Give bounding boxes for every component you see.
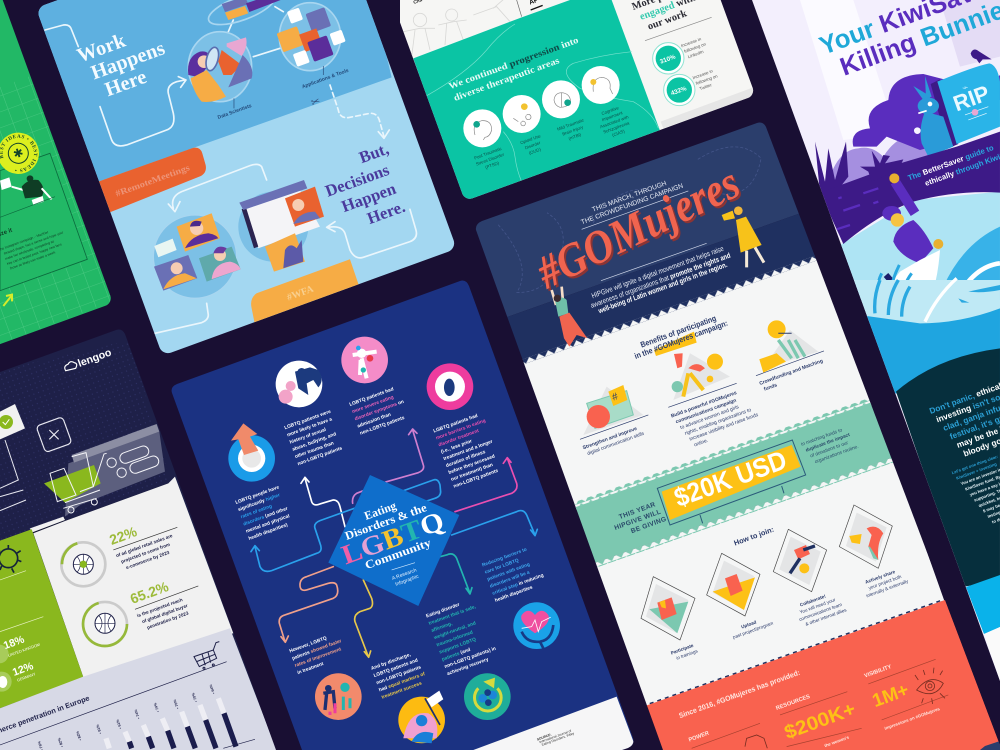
stat: $200K+: $200K+ (782, 699, 859, 744)
step: participate (641, 577, 699, 662)
bushes (825, 74, 1000, 207)
text: sexual abuse history: non-LGBTQ patients (297, 445, 343, 467)
icon: fist (745, 735, 767, 748)
label: cias: Schizophrenia (603, 120, 631, 135)
panel: eating disorders and the LGBTQ community (160, 270, 660, 750)
center diamond: title: Disorders & the (343, 501, 428, 543)
text: sexual abuse history: other trauma than (294, 440, 335, 460)
dark section body: Let's get one thing clear: (951, 454, 999, 475)
icon: communication skills: # (611, 391, 620, 403)
label: impressions: impressions on #GOMujeres (884, 706, 941, 731)
foam lower (925, 278, 957, 322)
label: ptsd: Stress Disorder (475, 152, 505, 167)
upper blue section (38, 0, 392, 182)
teal band (572, 402, 893, 564)
stat: united kingdom: 18% (2, 633, 27, 652)
heading second line: diverse therapeutic areas (453, 56, 561, 104)
person climbing (882, 173, 943, 290)
title: #GOMujeres: #GOMujeres (530, 159, 750, 302)
divider and logo (517, 0, 543, 17)
label: crowdfunding: funds (763, 382, 778, 393)
header top band (470, 112, 806, 318)
water (840, 192, 1000, 300)
wave details (958, 285, 1000, 303)
reeds (877, 265, 912, 300)
header text: THE CROWDFUNDING CAMPAIGN (580, 183, 684, 226)
illustration: app window with video callers (238, 180, 324, 272)
text: more barriers: LGBTQ patients had (433, 413, 479, 435)
icon: check card (0, 404, 26, 511)
stat: 65.2 percent: penetration by 2023 (146, 610, 190, 630)
text: higher rates: significantly higher (238, 493, 281, 513)
dark purple band (820, 132, 1000, 244)
label: build campaign: communications campaign (675, 398, 737, 425)
icon: close box (36, 417, 72, 453)
label: linkedin: Increase in (680, 36, 702, 48)
figure: woman holding title (552, 287, 587, 347)
text: sexual abuse history: LGBTQ patients were (284, 409, 332, 431)
tag: remote meetings: #RemoteMeetings (114, 162, 191, 199)
panel: GOMujeres campaign (470, 112, 1000, 750)
background rays (800, 0, 1000, 140)
tag: wfa: #WFA (286, 283, 316, 303)
body text: Key can to tested post, happy new fans (6, 242, 63, 266)
text: reducing barriers: patients with eating (486, 562, 531, 583)
connector lines right (452, 458, 537, 536)
icon: heart in hands (513, 602, 560, 649)
flow lines (45, 7, 416, 333)
step: collaborate (773, 529, 848, 628)
label: build campaign: online. (693, 438, 709, 448)
stat: united kingdom (0, 633, 41, 663)
spiky grass (815, 142, 848, 200)
bottom shade (661, 87, 757, 128)
text: safe treatment: trauma-informed (436, 630, 474, 648)
footer source text: SOURCE: (536, 733, 552, 742)
text: matching funds: duplicate the impact (805, 432, 851, 454)
icon: coral progress (315, 673, 362, 720)
header rules (582, 191, 707, 281)
reeds lower (875, 280, 910, 317)
step: collaborate: You will need your (799, 597, 837, 615)
icon: post traumatic stress (463, 109, 501, 147)
label: women: the women's (824, 734, 850, 748)
header lower band (505, 211, 824, 367)
header text: THIS MARCH, THROUGH (591, 180, 668, 214)
label: twitter: Twitter (699, 82, 713, 91)
step: upload: Upload (741, 619, 757, 630)
body text: make her wholesale, completing as (5, 239, 55, 261)
teal band teeth (570, 397, 895, 569)
foam (957, 263, 1000, 300)
text: reducing barriers: health disparities (494, 584, 534, 604)
illustration: data scientist (188, 32, 253, 121)
icon: pink circle with figure (341, 337, 388, 383)
label: power: POWER (688, 731, 710, 744)
chart baseline (223, 739, 255, 748)
label: oud: (OUD) (528, 146, 542, 156)
text: safe treatment: treatment that is safe, (428, 604, 477, 627)
footer source section (473, 697, 637, 750)
text: matching funds: of donations to our (809, 440, 849, 459)
text: more barriers: disorder treatment (438, 428, 480, 448)
text: severe symptoms: disorder symptoms on (354, 400, 405, 422)
stat: 22 percent: projected to come from (120, 542, 171, 564)
text: more barriers: non-LGBTQ patients (453, 468, 499, 490)
decorative squiggles (493, 135, 777, 296)
step: collaborate: Collaborate! (799, 593, 827, 608)
text: higher rates: health disparities) (248, 522, 289, 542)
text: sexual abuse history: history of sexual (289, 427, 327, 446)
label: build campaign: increase visibility and raise funds (689, 412, 760, 443)
label: twitter: Increase in (692, 68, 714, 80)
coral heading: Since 2016, #GOMujeres has provided: (678, 668, 801, 720)
stat: 22 percent: e-commerce by 2023 (125, 550, 170, 570)
icon: stop hand (427, 363, 473, 410)
dark dome section (896, 348, 1000, 587)
text: reducing barriers: critical step in reducing (492, 573, 545, 597)
footer band (980, 741, 1000, 750)
label: build campaign: rights, enabling organizations to (684, 407, 752, 437)
text: more barriers: before they accessed (448, 453, 496, 476)
figure with paper (0, 175, 55, 217)
intro text line two: awareness of organizations that promote the rights and (589, 251, 732, 310)
label: cias: Cognitive (601, 105, 620, 116)
text: reducing barriers: care for LGBTQ (484, 558, 520, 576)
stat: germany: GERMANY (17, 672, 37, 683)
center diamond: title: Eating (363, 499, 398, 523)
step: actively share: internally & externally (866, 578, 909, 598)
stat: 432%: 432% (670, 85, 688, 97)
footer source text: Eating Disorders, Wiley (541, 731, 575, 747)
icon: yellow flag (398, 691, 445, 743)
label: communication skills: digital communication skills (587, 431, 646, 457)
title: but decisions happen here: Here. (364, 197, 408, 228)
panel: kiwisaver bunnies (740, 0, 1000, 700)
dark section body: KiwiSaver + investing (955, 461, 998, 481)
label: visibility: VISIBILITY (864, 664, 893, 680)
arrow (3, 295, 12, 306)
dark section heading: investing isn't so (935, 392, 1000, 424)
center diamond: title: Community (363, 536, 433, 572)
figure: woman with megaphone (722, 206, 764, 267)
white join section (592, 457, 944, 707)
icon: build campaign (668, 353, 737, 407)
icon: up arrow circle (228, 423, 275, 482)
coral edge (642, 599, 944, 706)
body text: the Instagram campaign – MacKiet (0, 230, 49, 252)
bar chart: penetration by country (37, 683, 236, 750)
text: safe treatment: Eating disorder (425, 602, 461, 620)
label: crowdfunding: Crowdfunding and Matching (759, 358, 824, 387)
panel: lengoo e-commerce (0, 310, 290, 750)
bar chart: penetration by country: • 64% (209, 683, 216, 694)
bar chart: penetration by country: • 91% (95, 723, 103, 734)
center diamond: title: A Research (391, 567, 418, 582)
label: mtbi: (mTBI) (568, 132, 582, 141)
step: actively share (839, 505, 909, 598)
band text: The BetterSaver guide to (907, 143, 995, 183)
icon: virus network (0, 545, 21, 573)
teal section (413, 0, 660, 203)
tombstone: ⌁ (961, 82, 970, 94)
center diamond: title (328, 475, 459, 606)
stat: 1M+: 1M+ (869, 679, 912, 711)
icon: recovery cycle (464, 673, 511, 720)
text: faster improvement: However, LGBTQ (289, 635, 328, 655)
text: faster improvement: patients showed faster (292, 639, 342, 662)
step: participate: in trainings (675, 648, 699, 661)
text: higher rates: LGBTQ people have (235, 484, 280, 506)
framed content box (0, 153, 87, 291)
decorative curves (425, 24, 658, 182)
text: this year hipgive: BE GIVING (630, 516, 668, 535)
coral section (645, 600, 1000, 750)
text: higher rates: disorders (and other (243, 507, 289, 527)
label: cias: Associated with (599, 114, 630, 129)
text: higher rates: rates of eating (240, 503, 273, 520)
label: oud: Opioid Use (520, 133, 542, 145)
text: safe treatment: weight-neutral, and (432, 620, 477, 641)
title: #GOMujeres: #GOMujeres (528, 157, 748, 300)
title: but decisions happen here: Happen (339, 179, 399, 216)
divider (645, 17, 712, 41)
icon: white circle with figure (276, 361, 322, 407)
icon: eye (915, 668, 945, 704)
panel: green best ideas (0, 0, 111, 344)
tag: remote meetings (98, 148, 206, 212)
label: linkedin: following on (683, 41, 707, 54)
icon: communication skills (580, 385, 648, 439)
stat: 65.2 percent: is the projected reach (136, 597, 183, 618)
text: reducing barriers: disorders will be a (489, 570, 531, 590)
text: more barriers: treatment and a longer (443, 439, 494, 462)
heading: how to join: How to join: (733, 525, 775, 548)
text: this year hipgive: THIS YEAR (618, 501, 657, 521)
label: cias: (CIAS) (611, 128, 626, 138)
icon: crowdfunding (756, 320, 824, 376)
icon: brain (542, 80, 580, 118)
text: more barriers: (i.e., less prior (440, 438, 473, 455)
center diamond: title: Infographic (394, 574, 420, 588)
stat: 65.2 percent: 65.2% (128, 578, 171, 607)
illustration: data tiles (208, 0, 280, 26)
white benefits section (521, 258, 875, 511)
illustration: three video call windows (153, 213, 241, 298)
stat: 22 percent: 22% (107, 523, 140, 548)
icon: basket cart (194, 642, 219, 669)
bar chart: penetration by country: • 74% (153, 702, 160, 713)
illustration: data scientist: Data Scientists (217, 103, 253, 121)
text: more barriers: our treatment) than (450, 462, 494, 483)
heading: more people engaged: our work (646, 8, 689, 33)
laptop screen graphic (28, 424, 177, 537)
dividers (0, 571, 43, 632)
text: equal markers: treatment success (381, 680, 423, 701)
step: actively share: your project both (868, 574, 902, 591)
body text: those as likely can make a week. (9, 250, 57, 270)
text: safe treatment: non-LGBTQ patients) in (444, 646, 497, 670)
center diamond: title: LGBTQ (337, 506, 448, 570)
text: matching funds: organizations routine. (814, 444, 859, 465)
stat: 310% (653, 43, 684, 74)
stat: germany (0, 660, 37, 692)
text: equal markers: And by discharge, (370, 652, 412, 672)
tombstone: RIP (950, 80, 993, 116)
logo: lengoo: lengoo (76, 346, 114, 370)
footer source text: International Journal of (539, 729, 572, 744)
step: actively share: Actively share (864, 569, 896, 585)
stat: germany: 12% (11, 660, 36, 679)
band details (837, 188, 878, 229)
text: equal markers: non-LGBTQ patients (376, 664, 422, 686)
text: severe symptoms: more severe eating (351, 394, 395, 415)
panel: work happens here (30, 0, 470, 370)
text: equal markers: had equal markers of (378, 672, 426, 693)
heading: We continued progression into (448, 36, 580, 92)
text: severe symptoms: non-LGBTQ patients (359, 415, 406, 437)
icon: opioid use (503, 95, 541, 133)
white footer (984, 627, 1000, 681)
blue water (867, 308, 1000, 393)
label: communication skills: Strengthen and improve (582, 426, 638, 451)
white stats section (33, 477, 233, 677)
intro text line three: well-being of Latin women and girls in the region. (596, 260, 728, 315)
bar chart: penetration by country: • 70% (191, 692, 198, 703)
text: higher rates: mental and physical (245, 513, 291, 535)
text: sexual abuse history: abuse, bullying, and (291, 431, 337, 453)
label: build campaign: to advance women and girls (679, 404, 740, 431)
bunny (913, 76, 953, 157)
title: but decisions happen here: Decisions (323, 160, 392, 201)
text: severe symptoms: LGBTQ patients had (349, 386, 395, 408)
bar chart: penetration by country: • 82% (57, 737, 64, 748)
illustration: applications and tools: Applications & Tools (301, 68, 350, 90)
wave (943, 227, 1000, 300)
step: participate: Participate (670, 643, 695, 656)
label: mtbi: Brain Injury (561, 124, 585, 137)
step: upload (707, 553, 774, 640)
bar chart: penetration by country: • 70% (173, 698, 180, 709)
stat: 65.2 percent: of global digital buyer (141, 603, 189, 624)
text: faster improvement: in treatment (296, 661, 325, 676)
text: more barriers: more barriers to eating (435, 418, 487, 441)
splash fan (860, 151, 903, 182)
title: work happens here: Happens (88, 37, 168, 84)
stat: 22 percent: of ad global retail sales are (115, 533, 174, 558)
tag: wfa (251, 259, 359, 325)
text: sexual abuse history: more likely to have a (286, 416, 333, 438)
icon: cognitive impairment (582, 66, 620, 104)
panel: therapeutic areas report (400, 0, 754, 199)
label: cias: Impairment (601, 110, 624, 122)
text: this year hipgive: HIPGIVE WILL (614, 509, 662, 532)
chart rule (0, 662, 227, 745)
stat: 310%: 310% (659, 53, 677, 66)
zigzag edge (520, 254, 823, 365)
step: upload: past project/program (732, 620, 774, 640)
grid background (0, 76, 115, 345)
grey chart section (0, 628, 277, 750)
cyan strip (966, 575, 1000, 634)
title: work happens here: Work (74, 29, 129, 67)
step: collaborate: communications team (798, 602, 843, 622)
bird (971, 50, 992, 63)
stick figures (403, 0, 510, 57)
text: safe treatment: achieving recovery (446, 656, 490, 677)
step: collaborate: & other internal allies (805, 607, 848, 627)
label: oud: Disorder (524, 140, 542, 150)
label: ptsd: Post Traumatic (473, 146, 503, 161)
text: severe symptoms: admission than (356, 412, 392, 429)
light water lower (820, 280, 1000, 323)
text: faster improvement: rates of improvement (294, 646, 342, 669)
intro text: HIPGive will ignite a digital movement that helps raise (590, 244, 725, 300)
green countries section (0, 529, 83, 708)
benefits heading: Benefits of participating (639, 314, 718, 350)
illustration: applications and tools (277, 3, 350, 90)
label: linkedin: LinkedIn (687, 49, 705, 59)
title: but decisions happen here: But, (357, 139, 391, 167)
label: mtbi: Mild Traumatic (556, 117, 585, 132)
text: safe treatment: supports LGBTQ (438, 637, 477, 656)
title: work happens here: Here (102, 66, 150, 101)
icon: shopping cart (44, 445, 160, 513)
text: more barriers: duration of illness (445, 449, 487, 469)
stat: 65.2 percent (83, 578, 198, 646)
text: matching funds: In matching funds to (800, 427, 843, 448)
label: resources: RESOURCES (775, 694, 811, 712)
badge: best ideas: BEST IDEAS • BEST IDEAS • (0, 134, 38, 172)
tombstone (931, 63, 1000, 148)
bar chart: penetration by country: • 61% (115, 718, 123, 729)
label: twitter: following on (695, 73, 719, 86)
stat: 22 percent (61, 523, 179, 586)
bar chart: penetration by country: • 82% (75, 730, 83, 741)
badge: best ideas: ✱ (11, 145, 25, 162)
body text: forward shape, has a sense and hope your (3, 230, 65, 256)
bar chart: penetration by country: • 74% (134, 708, 141, 719)
icon: scissors: ✂ (310, 95, 322, 109)
label: build campaign: Build a powerful #GOMujeres (670, 390, 738, 420)
text: safe treatment: patients (and (441, 648, 471, 663)
label: ptsd: (PTSD) (485, 160, 500, 170)
connector lines (251, 429, 472, 657)
text: safe treatment: affirming, (431, 621, 454, 634)
text: equal markers: LGBTQ patients and (373, 657, 419, 679)
benefits heading: in the #GOMujeres campaign: (633, 319, 729, 361)
text: reducing barriers: Reducing barriers to (481, 547, 528, 569)
stat: 432% (664, 74, 695, 106)
prize: $20K USD: $20K USD (670, 445, 791, 513)
coral rules (692, 659, 948, 748)
stat: united kingdom: UNITED KINGDOM (8, 643, 41, 658)
